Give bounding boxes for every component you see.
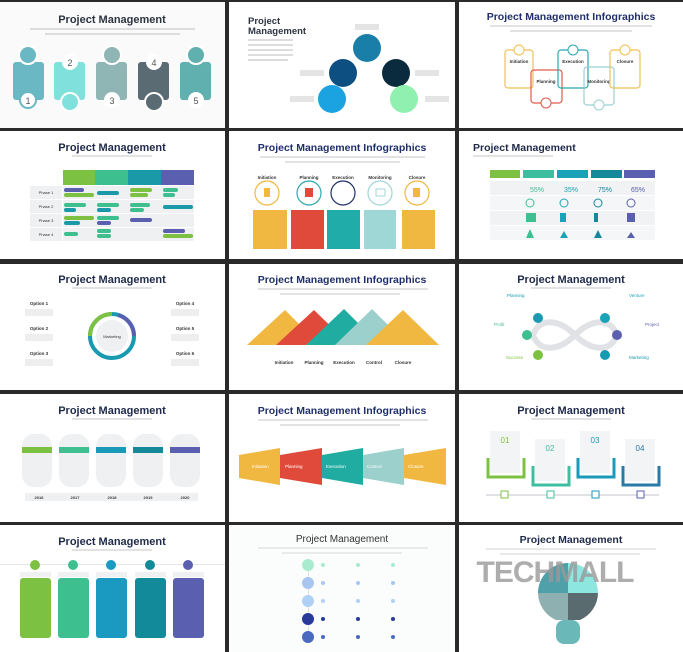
panel: slide 4: Phase 1 (39, 190, 54, 195)
panel: slide 9: Project Management (517, 274, 625, 286)
panel: slide 4: Project Management (58, 142, 166, 154)
panel: slide 3: Initiation (510, 59, 529, 64)
panel: slide 10: 2016 (35, 495, 44, 500)
panel: slide 10: 2018 (108, 495, 117, 500)
panel: slide 8: Closure (395, 360, 412, 365)
panel: slide 7 (0, 264, 225, 390)
panel: slide 6: 55% (530, 187, 544, 194)
panel: slide 15 (459, 525, 683, 652)
panel: slide 9: Venture (629, 293, 645, 298)
panel: slide 8 (229, 264, 455, 390)
panel: slide 1: Project Management (58, 14, 166, 26)
panel: slide 6: Project Management (473, 142, 576, 154)
panel: slide 11: Planning (285, 464, 303, 469)
panel: slide 11: Closure (408, 464, 424, 469)
panel: slide 2: Project (248, 16, 281, 27)
panel: slide 5: Planning (300, 175, 319, 180)
panel: slide 5: Execution (332, 175, 354, 180)
panel: slide 12 (459, 394, 683, 522)
panel: slide 4 (0, 131, 225, 259)
panel: slide 5: Initiation (258, 175, 277, 180)
panel: slide 7: Option 1 (30, 301, 49, 306)
panel: slide 1: 2 (67, 58, 73, 68)
panel: slide 1: 5 (193, 96, 199, 106)
panel: slide 10: Project Management (58, 405, 166, 417)
panel: slide 10 (0, 394, 225, 522)
panel: slide 5: Project Management Infographics (258, 142, 426, 154)
panel: slide 2 (229, 2, 455, 128)
panel: slide 9: Project (645, 322, 660, 327)
panel: slide 8: Control (366, 360, 382, 365)
panel: slide 3: Execution (562, 59, 584, 64)
panel: slide 11: Project Management Infographics (258, 405, 426, 417)
panel: slide 5: Monitoring (368, 175, 392, 180)
panel: slide 8: Initiation (275, 360, 294, 365)
panel: slide 8: Execution (333, 360, 355, 365)
panel: slide 9: Profit (494, 322, 505, 327)
panel: slide 2: Management (248, 26, 307, 37)
panel: slide 11 (229, 394, 455, 522)
panel: slide 10: 2017 (71, 495, 80, 500)
panel: slide 3: Closure (617, 59, 634, 64)
panel: slide 8: Planning (304, 360, 324, 365)
panel: slide 4: Phase 4 (39, 232, 54, 237)
panel: slide 12: 03 (591, 436, 600, 445)
panel: slide 15: Project Management (520, 534, 623, 546)
panel: slide 1: 3 (109, 96, 115, 106)
panel: slide 13: Project Management (58, 536, 166, 548)
panel: slide 12: Project Management (517, 405, 625, 417)
panel: slide 3: Project Management Infographics (487, 11, 655, 23)
panel: slide 7: Option 4 (176, 301, 195, 306)
panel: slide 3: Planning (536, 79, 556, 84)
panel: slide 5 (229, 131, 455, 259)
panel: slide 7: Option 6 (176, 351, 195, 356)
panel: slide 6: 35% (564, 187, 578, 194)
panel: slide 14: Project Management (296, 534, 388, 545)
panel: slide 6: 65% (631, 187, 645, 194)
panel: slide 15: TECHMALL (477, 556, 634, 589)
panel: slide 7: Project Management (58, 274, 166, 286)
panel: slide 4: Phase 2 (39, 204, 54, 209)
panel: slide 7: Option 3 (30, 351, 49, 356)
panel: slide 10: 2020 (181, 495, 190, 500)
panel: slide 12: 01 (501, 436, 510, 445)
panel: slide 11: Control (367, 464, 382, 469)
panel: slide 3 (459, 2, 683, 128)
panel: slide 7: Option 2 (30, 326, 49, 331)
panel: slide 12: 04 (636, 444, 645, 453)
panel: slide 1: 1 (25, 96, 31, 106)
panel: slide 1 (0, 2, 225, 128)
panel: slide 7: Marketing (103, 334, 121, 339)
panel: slide 5: Closure (409, 175, 426, 180)
panel: slide 1: 4 (151, 58, 157, 68)
panel: slide 10: 2019 (144, 495, 153, 500)
panel: slide 12: 02 (546, 444, 555, 453)
panel: slide 9: Success (506, 355, 524, 360)
panel: slide 4: Phase 3 (39, 218, 54, 223)
panel: slide 6: 75% (598, 187, 612, 194)
panel: slide 7: Option 5 (176, 326, 195, 331)
panel: slide 3: Monitoring (587, 79, 611, 84)
panel: slide 8: Project Management Infographics (258, 274, 426, 286)
panel: slide 6 (459, 131, 683, 259)
panel: slide 9: Marketing (629, 355, 649, 360)
panel: slide 9 (459, 264, 683, 390)
panel: slide 11: Execution (326, 464, 346, 469)
panel: slide 11: Initiation (252, 464, 269, 469)
panel: slide 9: Planning (507, 293, 525, 298)
panel: slide 14 (229, 525, 455, 652)
panel: slide 13 (0, 525, 225, 652)
